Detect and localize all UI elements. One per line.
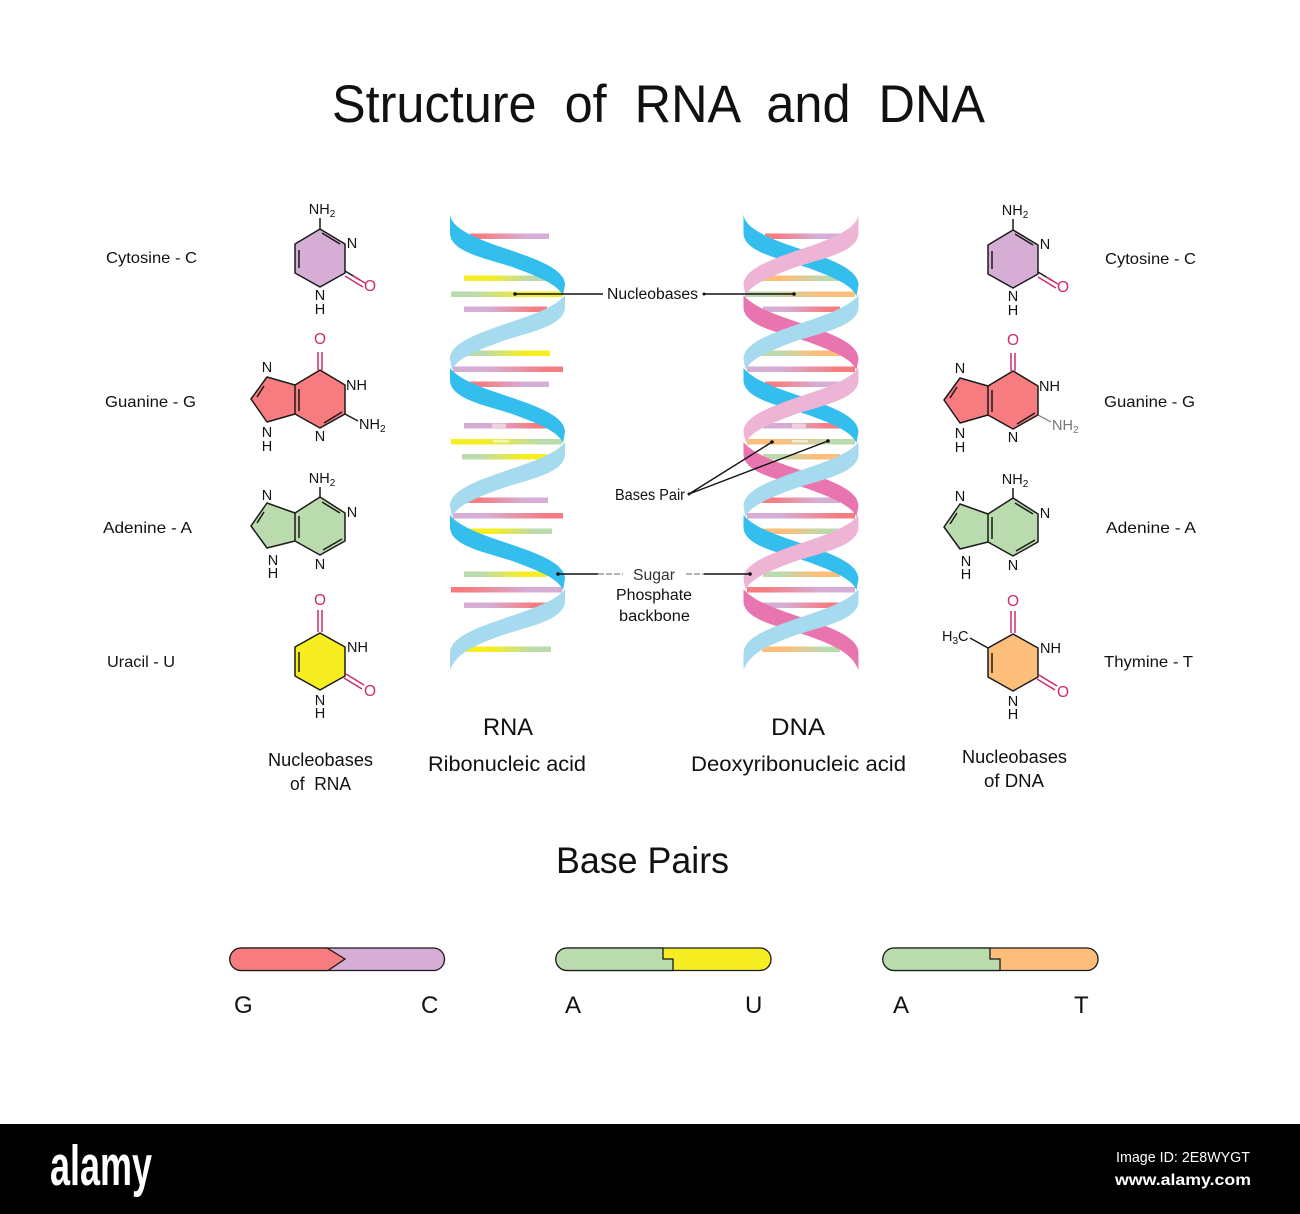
molecule: guanine: 2 bbox=[380, 424, 386, 435]
base pair: A-T bbox=[883, 948, 1098, 1019]
callout: bases pair: Bases Pair bbox=[615, 487, 685, 504]
molecule: guanine DNA: N bbox=[1008, 430, 1018, 446]
molecule: guanine DNA: NH bbox=[1039, 379, 1060, 395]
label: uracil: Uracil - U bbox=[107, 654, 175, 671]
molecule: guanine DNA bbox=[944, 332, 1079, 456]
label: cytosine DNA: Cytosine - C bbox=[1105, 251, 1196, 268]
molecule: adenine DNA: N bbox=[1040, 506, 1050, 522]
footer watermark bar: alamy bbox=[50, 1134, 152, 1198]
title: Structure of RNA and DNA bbox=[332, 75, 986, 134]
DNA light pink strand segments bbox=[744, 213, 858, 590]
molecule: cytosine: N bbox=[347, 236, 357, 252]
base pair: A-T: A bbox=[893, 992, 909, 1019]
base pair: A-U: A bbox=[565, 992, 581, 1019]
molecule: uracil: NH bbox=[347, 640, 368, 656]
footer watermark bar: www.alamy.com bbox=[1114, 1172, 1251, 1189]
molecule: cytosine bbox=[295, 202, 376, 318]
base pair: G-C: G bbox=[234, 992, 253, 1019]
heading: base pairs: Base Pairs bbox=[556, 840, 729, 881]
caption: nucleobases of RNA: Nucleobases bbox=[268, 750, 373, 770]
molecule: adenine: N bbox=[315, 557, 325, 573]
molecule: cytosine: 2 bbox=[330, 209, 336, 220]
molecule: cytosine: NH bbox=[309, 202, 330, 218]
molecule: adenine DNA bbox=[944, 472, 1050, 583]
molecule: adenine DNA: 2 bbox=[1023, 479, 1029, 490]
molecule: adenine: 2 bbox=[330, 478, 336, 489]
molecule: cytosine DNA bbox=[988, 203, 1069, 319]
callout: bases pair bbox=[615, 439, 830, 504]
caption: nucleobases of RNA: of RNA bbox=[290, 774, 351, 794]
base pair: A-U bbox=[556, 948, 771, 1019]
molecule: thymine: H bbox=[1008, 707, 1018, 723]
DNA hot pink strand segments bbox=[744, 295, 858, 670]
molecule: adenine: N bbox=[268, 553, 278, 569]
panel: DNA nucleobase structures bbox=[942, 203, 1079, 723]
caption: nucleobases of DNA: of DNA bbox=[984, 771, 1044, 791]
caption: nucleobases of DNA: Nucleobases bbox=[962, 747, 1067, 767]
label: guanine: Guanine - G bbox=[105, 394, 196, 411]
molecule: uracil: O bbox=[364, 683, 376, 700]
molecule: uracil: H bbox=[315, 706, 325, 722]
molecule: uracil: O bbox=[314, 592, 326, 609]
molecule: cytosine DNA: 2 bbox=[1023, 210, 1029, 221]
molecule: cytosine DNA: O bbox=[1057, 279, 1069, 296]
footer watermark bar: Image ID: 2E8WYGT bbox=[1116, 1149, 1250, 1166]
molecule: thymine: C bbox=[958, 629, 969, 645]
molecule: guanine: NH bbox=[359, 417, 380, 433]
molecule: adenine: NH bbox=[309, 471, 330, 487]
molecule: guanine DNA: N bbox=[955, 361, 965, 377]
label: thymine: Thymine - T bbox=[1104, 654, 1193, 671]
molecule: cytosine: O bbox=[364, 278, 376, 295]
panel: RNA nucleobase names bbox=[103, 250, 197, 671]
molecule: adenine DNA: NH bbox=[1002, 472, 1023, 488]
molecule: uracil bbox=[295, 592, 376, 722]
callout: sugar phosphate backbone: Phosphate bbox=[616, 587, 692, 604]
panel: DNA nucleobase names bbox=[1104, 251, 1196, 671]
molecule: guanine: N bbox=[315, 429, 325, 445]
molecule: cytosine DNA: NH bbox=[1002, 203, 1023, 219]
molecule: thymine bbox=[942, 593, 1069, 723]
label: adenine: Adenine - A bbox=[103, 520, 192, 537]
molecule: adenine: H bbox=[268, 566, 278, 582]
base pair: G-C bbox=[230, 948, 444, 1019]
molecule: adenine DNA: H bbox=[961, 567, 971, 583]
molecule: guanine bbox=[251, 331, 386, 455]
base pair: A-U: U bbox=[745, 992, 762, 1019]
panel: RNA nucleobase structures bbox=[251, 202, 386, 722]
molecule: thymine: NH bbox=[1040, 641, 1061, 657]
molecule: adenine DNA: N bbox=[1008, 558, 1018, 574]
RNA base bars bbox=[451, 234, 563, 652]
molecule: guanine: O bbox=[314, 331, 326, 348]
label: adenine DNA: Adenine - A bbox=[1106, 520, 1196, 537]
molecule: thymine: O bbox=[1057, 684, 1069, 701]
molecule: guanine: N bbox=[262, 360, 272, 376]
caption: DNA bbox=[691, 714, 906, 776]
caption: RNA: RNA bbox=[483, 714, 533, 741]
molecule: cytosine: H bbox=[315, 302, 325, 318]
RNA backbone light strand bbox=[450, 295, 565, 670]
callout: sugar phosphate backbone: Sugar bbox=[633, 567, 675, 584]
callout: nucleobases bbox=[513, 286, 796, 303]
molecule: cytosine: N bbox=[315, 288, 325, 304]
base pair: A-T: T bbox=[1074, 992, 1089, 1019]
molecule: adenine bbox=[251, 471, 357, 582]
base pair: G-C: C bbox=[421, 992, 438, 1019]
DNA base bars bbox=[745, 234, 855, 652]
molecule: cytosine DNA: H bbox=[1008, 303, 1018, 319]
molecule: thymine: O bbox=[1007, 593, 1019, 610]
molecule: guanine DNA: NH bbox=[1052, 418, 1073, 434]
molecule: guanine DNA: N bbox=[955, 426, 965, 442]
DNA dark blue strand segments bbox=[744, 213, 858, 590]
molecule: cytosine DNA: N bbox=[1040, 237, 1050, 253]
molecule: adenine: N bbox=[347, 505, 357, 521]
callout: sugar phosphate backbone bbox=[556, 567, 752, 625]
molecule: guanine DNA: 2 bbox=[1073, 425, 1079, 436]
DNA helix bbox=[744, 213, 858, 670]
caption: DNA: Deoxyribonucleic acid bbox=[691, 753, 906, 776]
RNA helix bbox=[450, 213, 565, 670]
molecule: adenine: N bbox=[262, 488, 272, 504]
molecule: thymine: 3 bbox=[952, 636, 958, 647]
molecule: cytosine DNA: N bbox=[1008, 289, 1018, 305]
molecule: guanine: H bbox=[262, 439, 272, 455]
caption: nucleobases of DNA bbox=[962, 747, 1067, 791]
molecule: thymine: N bbox=[1008, 694, 1018, 710]
molecule: uracil: N bbox=[315, 693, 325, 709]
callout: sugar phosphate backbone: backbone bbox=[619, 608, 690, 625]
label: cytosine: Cytosine - C bbox=[106, 250, 197, 267]
caption: DNA: DNA bbox=[771, 714, 825, 741]
molecule: guanine DNA: H bbox=[955, 440, 965, 456]
RNA backbone dark strand bbox=[450, 213, 565, 590]
callout: nucleobases: Nucleobases bbox=[607, 286, 698, 303]
molecule: guanine: NH bbox=[346, 378, 367, 394]
caption: nucleobases of RNA bbox=[268, 750, 373, 794]
caption: RNA bbox=[428, 714, 586, 776]
molecule: adenine DNA: N bbox=[961, 554, 971, 570]
DNA light blue strand segments bbox=[744, 295, 858, 670]
molecule: thymine: H bbox=[942, 629, 952, 645]
molecule: guanine DNA: O bbox=[1007, 332, 1019, 349]
molecule: guanine: N bbox=[262, 425, 272, 441]
caption: RNA: Ribonucleic acid bbox=[428, 753, 586, 776]
label: guanine DNA: Guanine - G bbox=[1104, 394, 1195, 411]
molecule: adenine DNA: N bbox=[955, 489, 965, 505]
footer watermark bar bbox=[0, 1124, 1300, 1214]
